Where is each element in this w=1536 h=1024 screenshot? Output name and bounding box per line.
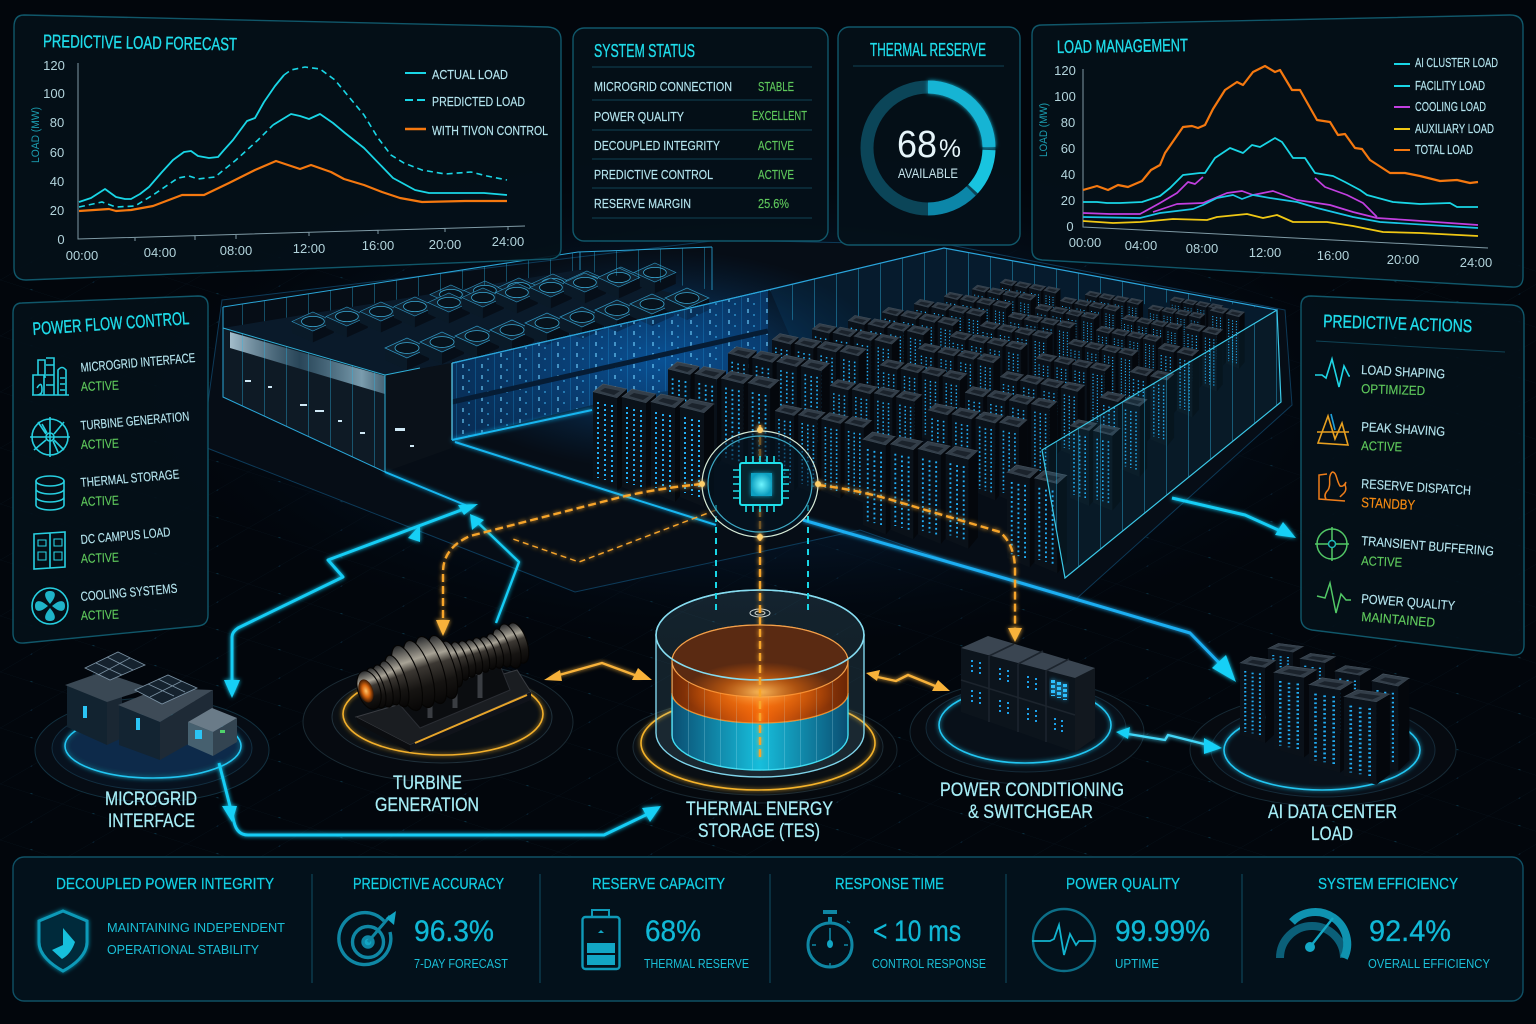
node label: turbine: TURBINE bbox=[393, 773, 462, 794]
orange bidirectional arrows bbox=[544, 663, 950, 691]
status rows: 25.6% bbox=[758, 196, 789, 211]
KPI: reserve capacity: RESERVE CAPACITY bbox=[592, 876, 725, 893]
node: power conditioning switchgear bbox=[910, 636, 1144, 784]
row: power quality bbox=[1361, 591, 1456, 630]
row: microgrid interface bbox=[80, 350, 196, 394]
server racks bbox=[1240, 643, 1409, 785]
panel: system status bbox=[573, 28, 828, 241]
axis labels: 100 bbox=[43, 86, 65, 101]
cooling units on roof bbox=[292, 263, 709, 370]
axis labels: 0 bbox=[1066, 219, 1074, 234]
row: reserve dispatch: RESERVE DISPATCH bbox=[1361, 476, 1472, 498]
axis labels: 20:00 bbox=[1387, 252, 1419, 267]
outer glass cylinder bbox=[656, 590, 864, 777]
legend: ACTUAL LOAD bbox=[432, 67, 508, 82]
small battery box bbox=[188, 708, 237, 756]
status rows: PREDICTIVE CONTROL bbox=[594, 167, 713, 182]
KPI: system efficiency: SYSTEM EFFICIENCY bbox=[1318, 876, 1458, 893]
row: DC campus load: DC CAMPUS LOAD bbox=[80, 524, 171, 547]
axis labels: 0 bbox=[57, 232, 65, 247]
icon: turbine bbox=[30, 417, 70, 457]
row: transient buffering: TRANSIENT BUFFERING bbox=[1361, 533, 1495, 559]
arrow: campus to predictive actions bbox=[1172, 498, 1285, 533]
axis labels: 60 bbox=[50, 145, 64, 160]
turbine body bbox=[352, 620, 533, 714]
hot layer bbox=[672, 625, 848, 723]
legend: FACILITY LOAD bbox=[1415, 78, 1485, 93]
icon: thermal storage bbox=[36, 476, 64, 510]
row: thermal storage bbox=[80, 466, 180, 509]
node: AI data center load bbox=[1190, 643, 1456, 806]
glowing floor lines bbox=[385, 410, 716, 525]
axis labels: 08:00 bbox=[1186, 241, 1218, 256]
KPI: predictive accuracy bbox=[339, 876, 508, 971]
arrow: switchgear to data center bbox=[1122, 733, 1212, 746]
icon: stopwatch bbox=[808, 912, 852, 967]
node: turbine generation bbox=[303, 620, 573, 782]
platform bbox=[617, 696, 897, 803]
row: transient buffering: ACTIVE bbox=[1361, 553, 1403, 570]
axis labels: 16:00 bbox=[362, 238, 394, 253]
platform bbox=[303, 662, 573, 782]
axis labels: 60 bbox=[1061, 141, 1075, 156]
hot surface bbox=[672, 625, 848, 697]
icon: shield bbox=[39, 911, 87, 971]
axis labels: 12:00 bbox=[293, 241, 325, 256]
donut gauge bbox=[867, 87, 989, 209]
series: AI cluster load bbox=[1083, 195, 1478, 228]
icon: pulse circle bbox=[1032, 909, 1096, 971]
node label: AI data center bbox=[1268, 802, 1397, 845]
icon: gauge bbox=[1280, 912, 1347, 958]
arrow: campus to data center load bbox=[803, 520, 1230, 674]
heading: SYSTEM STATUS bbox=[594, 41, 695, 61]
gauge value: AVAILABLE bbox=[898, 166, 958, 181]
axis labels: 20:00 bbox=[429, 237, 461, 252]
legend: WITH TIVON CONTROL bbox=[432, 123, 548, 138]
heading: PREDICTIVE LOAD FORECAST bbox=[43, 31, 237, 54]
node label: AI data center: AI DATA CENTER bbox=[1268, 802, 1397, 823]
back glass walls bbox=[223, 247, 1277, 472]
KPI: system efficiency: OVERALL EFFICIENCY bbox=[1368, 956, 1490, 971]
node label: power conditioning: POWER CONDITIONING bbox=[940, 780, 1124, 801]
gauge value: % bbox=[939, 135, 961, 163]
row: peak shaving: PEAK SHAVING bbox=[1361, 419, 1446, 439]
node label: thermal storage: THERMAL ENERGY bbox=[686, 799, 833, 820]
blue ambient glow bbox=[430, 250, 890, 470]
KPI: reserve capacity: 68% bbox=[645, 915, 701, 948]
row: turbine generation bbox=[80, 409, 190, 452]
status rows: POWER QUALITY bbox=[594, 109, 684, 124]
status rows: EXCELLENT bbox=[752, 108, 807, 123]
axis labels: LOAD (MW) bbox=[30, 107, 42, 163]
node label: turbine: GENERATION bbox=[375, 795, 479, 816]
KPI: predictive accuracy: 96.3% bbox=[414, 915, 494, 948]
node label: thermal storage: STORAGE (TES) bbox=[698, 821, 820, 842]
solar panels bbox=[85, 652, 197, 704]
row: microgrid interface: MICROGRID INTERFACE bbox=[80, 350, 196, 375]
icon: transient buffering bbox=[1315, 527, 1349, 561]
row: load shaping: LOAD SHAPING bbox=[1361, 362, 1446, 381]
series: auxiliary load bbox=[1083, 214, 1478, 236]
KPI: system efficiency bbox=[1280, 876, 1490, 971]
axis labels: 100 bbox=[1054, 89, 1076, 104]
platform bbox=[910, 680, 1144, 784]
row: load shaping bbox=[1361, 362, 1446, 398]
chip connection nodes bbox=[699, 427, 821, 540]
KPI: predictive accuracy: 7-DAY FORECAST bbox=[414, 956, 508, 971]
series: facility load bbox=[1083, 138, 1478, 207]
cylinder front rim bbox=[656, 590, 864, 680]
central control chip bbox=[436, 425, 1022, 760]
panel: predictive actions bbox=[1301, 296, 1524, 655]
legend bbox=[405, 67, 548, 138]
row: peak shaving bbox=[1361, 419, 1446, 454]
icon: target bbox=[339, 911, 396, 965]
line chart bbox=[1038, 63, 1492, 270]
node label: AI data center: LOAD bbox=[1311, 824, 1353, 845]
status rows: DECOUPLED INTEGRITY bbox=[594, 138, 720, 153]
row: turbine generation: TURBINE GENERATION bbox=[80, 409, 190, 433]
row: power quality: MAINTAINED bbox=[1361, 609, 1436, 630]
arrow: microgrid to thermal storage bbox=[219, 763, 652, 835]
flow arrows: cyan power lines bbox=[219, 498, 1285, 835]
row: microgrid interface: ACTIVE bbox=[81, 378, 119, 394]
series: predicted load bbox=[79, 67, 507, 207]
axis labels: 00:00 bbox=[66, 248, 98, 263]
axis labels: 80 bbox=[50, 115, 64, 130]
KPI: reserve capacity: THERMAL RESERVE bbox=[644, 956, 749, 971]
row: reserve dispatch: STANDBY bbox=[1361, 494, 1416, 513]
row: power quality: POWER QUALITY bbox=[1361, 591, 1456, 613]
skid base bbox=[356, 665, 531, 752]
icon: battery bbox=[582, 910, 620, 969]
row: thermal storage: ACTIVE bbox=[81, 493, 119, 509]
KPI: response time: CONTROL RESPONSE bbox=[872, 956, 986, 971]
platform bbox=[35, 698, 269, 802]
heading: POWER FLOW CONTROL bbox=[32, 308, 190, 339]
icon: peak shaving bbox=[1317, 414, 1349, 445]
tank grid lines bbox=[672, 661, 848, 770]
arrow: thermal storage and switchgear bbox=[866, 670, 950, 691]
icon: reserve dispatch bbox=[1319, 472, 1346, 501]
KPI: power quality: UPTIME bbox=[1115, 956, 1159, 971]
row: peak shaving: ACTIVE bbox=[1361, 438, 1403, 454]
legend bbox=[1394, 55, 1498, 157]
panel: KPI strip bbox=[13, 857, 1523, 1001]
KPI: response time: < 10 ms bbox=[873, 915, 961, 948]
orange dashed control lines bbox=[443, 425, 1015, 760]
row: thermal storage: THERMAL STORAGE bbox=[80, 466, 180, 490]
axis labels bbox=[1038, 63, 1492, 270]
legend: PREDICTED LOAD bbox=[432, 94, 525, 109]
cyan dashed drops bbox=[716, 505, 808, 610]
node label: microgrid bbox=[105, 789, 197, 832]
turbine intake glow bbox=[356, 677, 376, 705]
arrow: microgrid to campus bbox=[232, 506, 472, 690]
axis labels: 20 bbox=[1061, 193, 1075, 208]
node: thermal energy storage bbox=[617, 590, 897, 803]
gauge value: 68 bbox=[897, 124, 937, 166]
chip halo rings bbox=[702, 431, 818, 537]
node label: turbine bbox=[375, 773, 479, 816]
platform bbox=[1190, 694, 1456, 806]
heading: LOAD MANAGEMENT bbox=[1057, 35, 1188, 57]
series: actual load bbox=[79, 75, 507, 202]
row: reserve dispatch bbox=[1361, 476, 1472, 513]
row: cooling systems: ACTIVE bbox=[81, 607, 119, 623]
node label: power conditioning bbox=[940, 780, 1124, 823]
server rack rows bbox=[593, 279, 1245, 573]
orange arrowheads bbox=[436, 620, 1022, 642]
icon: load shaping pulse bbox=[1315, 359, 1350, 387]
KPI: power quality: POWER QUALITY bbox=[1066, 876, 1180, 893]
KPI: decoupled power integrity bbox=[39, 876, 285, 971]
axis labels: 24:00 bbox=[1460, 255, 1492, 270]
KPI: power quality: 99.99% bbox=[1115, 915, 1210, 948]
panel: thermal reserve bbox=[838, 27, 1020, 245]
status rows: MICROGRID CONNECTION bbox=[594, 79, 732, 94]
panel: power flow control bbox=[13, 296, 208, 643]
icon: cooling fan bbox=[32, 588, 68, 624]
KPI: response time bbox=[808, 876, 986, 971]
icon: microgrid bbox=[32, 358, 69, 395]
chip bbox=[733, 456, 789, 512]
KPI: response time: RESPONSE TIME bbox=[835, 876, 944, 893]
row: DC campus load bbox=[80, 524, 171, 566]
data center campus bbox=[207, 240, 1292, 600]
row: DC campus load: ACTIVE bbox=[81, 550, 119, 566]
row: transient buffering bbox=[1361, 533, 1495, 570]
series: cooling load bbox=[1083, 177, 1478, 225]
panel: load management bbox=[1032, 15, 1523, 287]
axis labels: 40 bbox=[1061, 167, 1075, 182]
KPI: predictive accuracy: PREDICTIVE ACCURACY bbox=[353, 876, 504, 893]
axis labels: 08:00 bbox=[220, 243, 252, 258]
heading: PREDICTIVE ACTIONS bbox=[1323, 311, 1472, 336]
row: turbine generation: ACTIVE bbox=[81, 436, 119, 452]
axis labels: 120 bbox=[43, 58, 65, 73]
KPI: reserve capacity bbox=[582, 876, 749, 971]
row: load shaping: OPTIMIZED bbox=[1361, 381, 1425, 398]
panel: predictive load forecast bbox=[14, 15, 561, 280]
left hall blue glass wall with racks bbox=[452, 290, 768, 440]
core spot glow bbox=[684, 662, 836, 722]
status rows: ACTIVE bbox=[758, 138, 794, 153]
campus platform bbox=[207, 240, 1292, 600]
row: cooling systems bbox=[80, 581, 178, 623]
icon: power quality pulse bbox=[1317, 583, 1351, 613]
arrow: turbine and thermal storage bbox=[544, 663, 652, 681]
status rows: STABLE bbox=[758, 79, 794, 94]
axis labels: 16:00 bbox=[1317, 248, 1349, 263]
status rows: ACTIVE bbox=[758, 167, 794, 182]
axis labels: 20 bbox=[50, 203, 64, 218]
gauge value bbox=[897, 124, 961, 181]
axis labels: 04:00 bbox=[1125, 238, 1157, 253]
KPI: decoupled power integrity: MAINTAINING INDEPENDENT bbox=[107, 920, 285, 935]
node label: microgrid: INTERFACE bbox=[108, 811, 195, 832]
right glass wall bbox=[453, 248, 1281, 578]
cold layer bbox=[672, 693, 848, 770]
legend: AI CLUSTER LOAD bbox=[1415, 55, 1498, 70]
axis labels: 24:00 bbox=[492, 234, 524, 249]
legend: COOLING LOAD bbox=[1415, 99, 1486, 114]
axis labels: 12:00 bbox=[1249, 245, 1281, 260]
status rows bbox=[594, 79, 807, 211]
series: total load bbox=[1083, 66, 1478, 190]
KPI: power quality bbox=[1032, 876, 1210, 971]
axis labels: 04:00 bbox=[144, 245, 176, 260]
cabinets bbox=[961, 636, 1095, 752]
line chart bbox=[30, 58, 525, 263]
status rows: RESERVE MARGIN bbox=[594, 196, 691, 211]
heading: THERMAL RESERVE bbox=[870, 40, 986, 60]
left hall facade bbox=[223, 328, 452, 472]
legend: TOTAL LOAD bbox=[1415, 142, 1473, 157]
node: microgrid interface bbox=[35, 652, 269, 802]
cyan arrowheads bbox=[222, 504, 1296, 822]
axis labels: 40 bbox=[50, 174, 64, 189]
axis labels: LOAD (MW) bbox=[1038, 103, 1050, 157]
KPI: decoupled power integrity: DECOUPLED POWER INTEGRITY bbox=[56, 876, 274, 893]
series: with Tivon control bbox=[79, 161, 507, 211]
row: cooling systems: COOLING SYSTEMS bbox=[80, 581, 178, 604]
node label: microgrid: MICROGRID bbox=[105, 789, 197, 810]
axis labels: 80 bbox=[1061, 115, 1075, 130]
node label: power conditioning: & SWITCHGEAR bbox=[968, 802, 1093, 823]
axis labels: 120 bbox=[1054, 63, 1076, 78]
axis labels bbox=[30, 58, 524, 263]
arrow: turbine to campus bbox=[473, 518, 519, 623]
building two bbox=[118, 688, 213, 760]
icon: DC campus bbox=[34, 532, 65, 569]
node label: thermal storage bbox=[686, 799, 833, 842]
top marker bbox=[750, 609, 770, 617]
KPI: system efficiency: 92.4% bbox=[1369, 915, 1451, 948]
left hall roof bbox=[223, 270, 700, 375]
KPI: decoupled power integrity: OPERATIONAL STABILITY bbox=[107, 942, 259, 957]
axis labels: 00:00 bbox=[1069, 235, 1101, 250]
building one bbox=[65, 672, 150, 745]
legend: AUXILIARY LOAD bbox=[1415, 121, 1494, 136]
